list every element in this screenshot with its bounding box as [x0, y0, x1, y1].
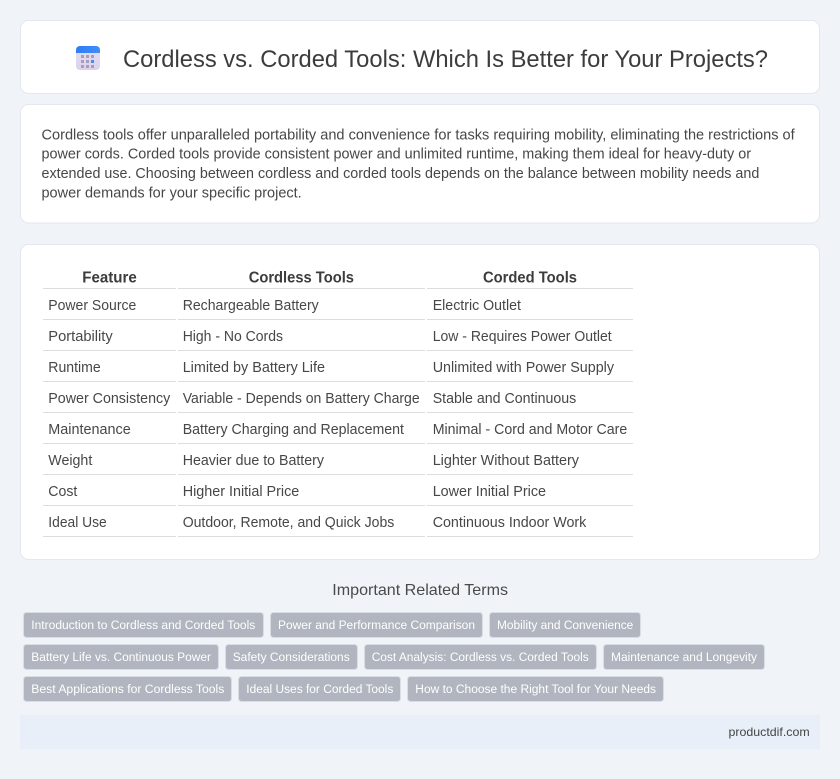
row: power source: Rechargeable Battery [183, 298, 319, 314]
tag [24, 676, 232, 702]
panel: title [20, 20, 820, 94]
row: cost: Cost [48, 484, 77, 500]
tag [364, 644, 596, 670]
intro paragraph: power demands for your specific project. [42, 186, 302, 202]
row: runtime: Runtime [48, 360, 101, 376]
row: portability: Low - Requires Power Outlet [433, 329, 612, 345]
row: power consistency [43, 391, 633, 413]
row: cost [43, 484, 633, 506]
tag: Maintenance and Longevity [611, 650, 758, 664]
row: runtime [43, 360, 633, 382]
tag [238, 676, 400, 702]
tag group: related terms [24, 612, 764, 702]
row: ideal use: Continuous Indoor Work [433, 515, 587, 531]
row: power consistency: Variable - Depends on Battery Charge [183, 391, 420, 407]
footer bar [20, 715, 820, 749]
panel: introduction [20, 104, 820, 223]
tag: How to Choose the Right Tool for Your Needs [415, 682, 656, 696]
tag: Cost Analysis: Cordless vs. Corded Tools [372, 650, 589, 664]
tag: Safety Considerations [233, 650, 350, 664]
tag: Ideal Uses for Corded Tools [246, 682, 393, 696]
tag: Introduction to Cordless and Corded Tools [31, 618, 255, 632]
row: power source [43, 298, 633, 320]
panel: comparison table [20, 244, 820, 560]
row: power source: Power Source [48, 298, 136, 314]
intro paragraph [42, 127, 796, 202]
title text: Cordless vs. Corded Tools: Which Is Better for Your Projects? [123, 46, 768, 73]
row: portability: Portability [48, 329, 114, 345]
row: cost: Lower Initial Price [433, 484, 546, 500]
footer source text: productdif.com [728, 725, 810, 739]
heading: important related terms: Important Related Terms [332, 582, 508, 599]
tag [270, 612, 482, 638]
row: portability [43, 329, 633, 351]
row: maintenance: Battery Charging and Replacement [183, 422, 404, 438]
row: runtime: Unlimited with Power Supply [433, 360, 615, 376]
tag: Mobility and Convenience [497, 618, 634, 632]
row: weight: Heavier due to Battery [183, 453, 325, 469]
table header row: Corded Tools [483, 270, 577, 286]
table header row: Feature [82, 270, 137, 286]
table header row [43, 270, 633, 289]
row: runtime: Limited by Battery Life [183, 360, 325, 376]
table header row: Cordless Tools [249, 270, 354, 286]
tag [604, 644, 764, 670]
row: weight: Lighter Without Battery [433, 453, 580, 469]
row: power consistency: Stable and Continuous [433, 391, 576, 407]
row: portability: High - No Cords [183, 329, 283, 345]
row: weight: Weight [48, 453, 92, 469]
tag: Battery Life vs. Continuous Power [31, 650, 211, 664]
tag [24, 612, 264, 638]
icon: calendar [76, 46, 100, 70]
tag [226, 644, 358, 670]
row: cost: Higher Initial Price [183, 484, 299, 500]
row: ideal use: Outdoor, Remote, and Quick Jobs [183, 515, 394, 531]
row: maintenance [43, 422, 633, 444]
tag [490, 612, 640, 638]
row: maintenance: Maintenance [48, 422, 131, 438]
intro paragraph: power cords. Corded tools provide consistent power and unlimited runtime, making them ideal for heavy-duty or [42, 147, 751, 163]
row: power source: Electric Outlet [433, 298, 521, 314]
intro paragraph: extended use. Choosing between cordless and corded tools depends on the balance between mobility needs and [42, 166, 759, 182]
tag [408, 676, 664, 702]
row: power consistency: Power Consistency [48, 391, 171, 407]
row: weight [43, 453, 633, 475]
row: ideal use: Ideal Use [48, 515, 107, 531]
tag [24, 644, 218, 670]
row: maintenance: Minimal - Cord and Motor Care [433, 422, 627, 438]
intro paragraph: Cordless tools offer unparalleled portability and convenience for tasks requiring mobility, eliminating the restrictions of [42, 127, 796, 143]
row: ideal use [43, 515, 633, 537]
tag: Best Applications for Cordless Tools [31, 682, 224, 696]
tag: Power and Performance Comparison [278, 618, 475, 632]
